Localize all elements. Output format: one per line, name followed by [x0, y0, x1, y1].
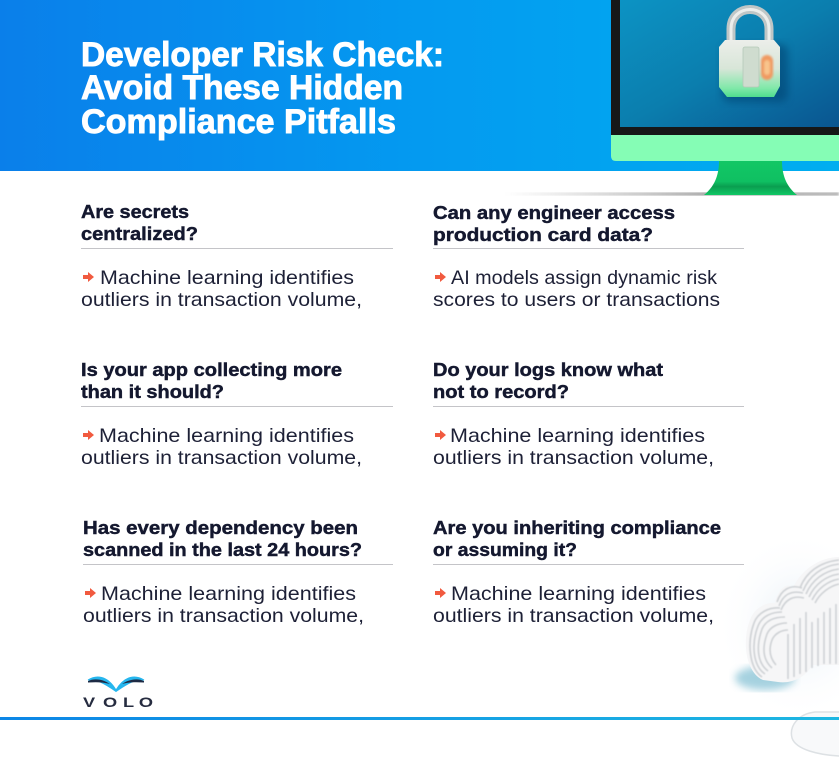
plug cable	[791, 712, 839, 756]
panel: production card data	[433, 202, 744, 311]
icon: arrow	[435, 272, 446, 282]
title: Compliance Pitfalls	[81, 103, 396, 141]
illustration: white cloud	[715, 530, 839, 756]
title: Developer Risk Check:	[81, 36, 444, 74]
heading: or assuming it?	[433, 539, 577, 560]
text block: Machine learning identifies	[450, 425, 705, 447]
heading: Has every dependency been	[83, 517, 358, 538]
bottom line	[0, 717, 839, 720]
text block: Machine learning identifies	[101, 583, 356, 605]
monitor bezel	[611, 0, 839, 136]
panel: logs	[433, 359, 744, 469]
heading: than it should?	[81, 381, 224, 402]
heading: production card data?	[433, 224, 653, 245]
text block: outliers in transaction volume,	[433, 605, 714, 627]
heading	[433, 202, 675, 245]
text block: Machine learning identifies	[99, 425, 354, 447]
icon: arrow	[435, 588, 446, 598]
heading	[433, 359, 663, 402]
text block: Machine learning identifies	[451, 583, 706, 605]
heading: scanned in the last 24 hours?	[83, 539, 362, 560]
text block: outliers in transaction volume,	[83, 605, 364, 627]
heading: Is your app collecting more	[81, 359, 342, 380]
heading: Can any engineer access	[433, 202, 675, 223]
text block: AI models assign dynamic risk	[451, 267, 717, 289]
text block: outliers in transaction volume,	[433, 447, 714, 469]
text block	[83, 583, 364, 627]
text block	[433, 425, 714, 469]
title: Avoid These Hidden	[81, 69, 403, 107]
heading: Do your logs know what	[433, 359, 663, 380]
logo: Volo	[83, 677, 153, 710]
monitor stand	[704, 161, 797, 195]
heading: centralized?	[81, 223, 198, 244]
panel: app collecting	[81, 359, 393, 469]
heading: Are secrets	[81, 201, 189, 222]
header band	[0, 0, 839, 171]
text block	[433, 267, 720, 311]
heading	[433, 517, 721, 560]
text block: scores to users or transactions	[433, 289, 720, 311]
heading	[83, 517, 362, 560]
illustration: monitor with padlock	[505, 0, 839, 196]
text block	[433, 583, 714, 627]
heading: Are you inheriting compliance	[433, 517, 721, 538]
panel: inheriting compliance	[433, 517, 744, 627]
icon: padlock	[719, 10, 788, 102]
icon: arrow	[83, 430, 94, 440]
heading	[81, 359, 342, 402]
monitor screen	[620, 0, 839, 127]
heading	[81, 201, 198, 244]
text block: outliers in transaction volume,	[81, 447, 362, 469]
logo: Volo: VOLO	[83, 695, 153, 710]
text block	[81, 425, 362, 469]
panel: dependency scan	[83, 517, 393, 627]
icon: arrow	[85, 588, 96, 598]
heading: not to record?	[433, 381, 569, 402]
icon: arrow	[83, 272, 94, 282]
text block	[81, 267, 362, 311]
monitor chin	[611, 135, 839, 161]
cloud shadow	[735, 666, 795, 690]
icon: arrow	[435, 430, 446, 440]
text block: Machine learning identifies	[100, 267, 354, 289]
text block: outliers in transaction volume,	[81, 289, 362, 311]
title	[81, 36, 444, 141]
panel: secrets centralized	[81, 201, 393, 311]
